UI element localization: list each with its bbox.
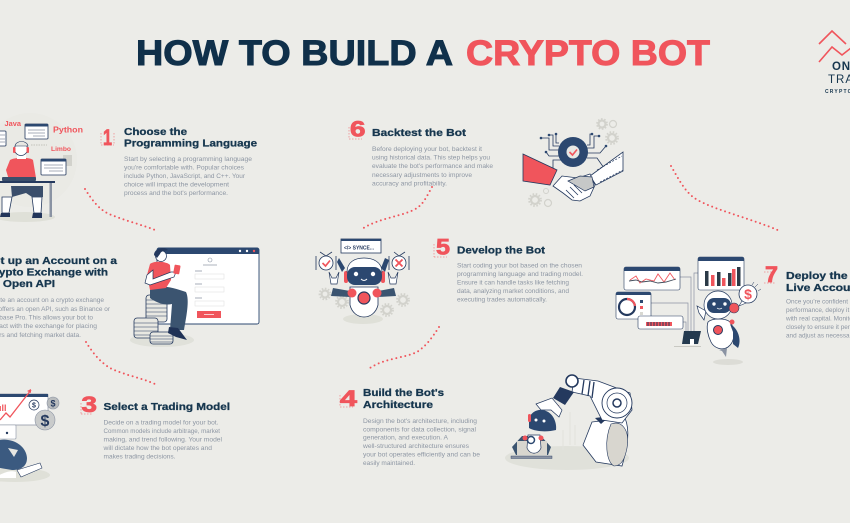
step 1 heading: Choose the	[124, 126, 187, 138]
step 4 body: Design the bot's architecture, including	[363, 418, 477, 425]
language labels: Limbo	[51, 146, 71, 153]
coin icons	[35, 397, 59, 430]
laptop	[674, 331, 701, 346]
bot head	[528, 410, 556, 431]
step 4 heading: Architecture	[363, 399, 433, 411]
step 3 body: Common models include arbitrage, market	[104, 428, 220, 435]
step 3 body	[102, 420, 222, 460]
progress window	[638, 316, 683, 329]
step 3 body: making, and trend following. Your model	[104, 436, 222, 444]
title: CRYPTO BOT	[466, 34, 710, 73]
illustration: programmer at desk	[0, 113, 83, 222]
check badge	[316, 252, 336, 270]
step 5 body	[457, 262, 583, 304]
coin icons: $	[41, 413, 50, 430]
donut chart window	[616, 292, 651, 319]
step 6 body	[372, 146, 493, 188]
illustration: deployed bot with dashboards	[616, 257, 761, 365]
step 6 body: using historical data. This step helps you	[372, 154, 490, 162]
floating robot	[697, 291, 740, 357]
step 3 body: makes trading decisions.	[104, 454, 176, 460]
dollar speech bubble: $	[744, 286, 752, 302]
dotted connector: step 2 to 3	[86, 342, 155, 384]
step 5 body: executing trades automatically.	[457, 296, 547, 304]
illustration: handshake with robot and brain chip	[523, 119, 623, 206]
person	[0, 142, 43, 218]
step 4 heading: Build the Bot's	[363, 387, 444, 399]
step 3	[81, 392, 230, 460]
step 1 body: choice will impact the development	[124, 182, 229, 188]
language labels: Python	[53, 124, 83, 134]
step 1 heading: Programming Language	[124, 138, 257, 150]
step 7 heading: Live Account	[786, 282, 850, 294]
gears	[320, 288, 409, 316]
arm base	[583, 416, 628, 466]
step 6 number: 6	[350, 116, 366, 142]
dollar speech bubble	[739, 282, 761, 306]
step 1 body: you're comfortable with. Popular choices	[124, 164, 244, 172]
cross badge	[389, 252, 409, 270]
step 4 body: generation, and execution. A	[363, 434, 449, 442]
step 7	[764, 262, 850, 340]
step 4	[340, 386, 480, 467]
red sleeve	[523, 154, 557, 185]
step 4 body: well-structured architecture ensures	[362, 443, 469, 450]
step 6 body: Before deploying your bot, backtest it	[372, 146, 482, 153]
step 5 body: Start coding your bot based on the chosen	[457, 262, 582, 270]
step 4 body: components for data collection, signal	[363, 426, 476, 434]
language labels	[4, 121, 83, 153]
step 1 body	[124, 156, 252, 197]
step 6	[349, 116, 493, 188]
step 4 body: your bot operates efficiently and can be	[363, 452, 480, 458]
step 1 heading	[124, 126, 257, 150]
step 3 number: 3	[82, 392, 97, 417]
step 2 heading	[0, 255, 117, 290]
illustration: trading model chart with coins	[0, 389, 59, 482]
step 3 heading: Select a Trading Model	[104, 401, 230, 413]
step 2	[0, 255, 117, 339]
step 4 heading	[363, 387, 444, 411]
step 6 body: necessary adjustments to improve	[372, 172, 472, 179]
step 1 body: include Python, JavaScript, and C++. Your	[124, 173, 246, 180]
step 5 number: 5	[436, 234, 450, 260]
gears	[529, 119, 618, 206]
logo	[819, 31, 850, 95]
seated person with laptop	[0, 425, 42, 478]
trading window: $	[32, 402, 36, 410]
gripper	[536, 387, 574, 417]
step 5 heading: Develop the Bot	[457, 244, 546, 256]
dotted connector: step 6 to 7	[671, 166, 780, 231]
step 7 number: 7	[765, 262, 778, 287]
dotted connector: step 4 to 5	[370, 327, 439, 368]
bar chart window	[698, 257, 744, 290]
line chart window	[624, 267, 680, 290]
step 4 number	[340, 386, 358, 411]
illustration: robot arm assembling bot	[505, 375, 632, 470]
robot arm	[590, 152, 623, 185]
bot torso on table	[511, 435, 552, 458]
code window: </> SYNCE...	[344, 246, 375, 252]
exchange sign-up window	[157, 248, 259, 324]
seated person	[145, 248, 188, 340]
code window	[25, 124, 48, 139]
coin icons: $	[50, 398, 56, 408]
step 4 body	[362, 418, 480, 467]
dotted connector: step 5 to 6	[362, 187, 432, 229]
title: HOW TO BUILD A	[136, 34, 453, 73]
step 3 body: Decide on a trading model for your bot.	[104, 420, 219, 426]
step 1 body: Start by selecting a programming language	[124, 156, 252, 163]
step 4 number: 4	[340, 386, 358, 411]
code window lower	[41, 159, 66, 175]
step 5 body: Ensure it can handle tasks like fetching	[457, 280, 569, 286]
coin stacks	[134, 295, 173, 344]
illustration: robot developing code	[316, 239, 409, 324]
step 1	[101, 125, 257, 197]
step 1 body: process and the bot's performance.	[124, 190, 228, 197]
desk	[0, 177, 55, 217]
step 4 body: easily maintained.	[363, 460, 415, 467]
step 1 number: 1	[103, 125, 112, 150]
step 6 body: evaluate the bot's performance and make	[372, 163, 493, 170]
title	[136, 34, 710, 73]
step 7 heading	[786, 270, 850, 294]
step 5 body: programming language and trading model.	[457, 271, 583, 278]
step 7 body	[785, 298, 850, 340]
step 6 body: accuracy and profitability.	[372, 180, 447, 188]
arm upper	[566, 375, 632, 423]
step 5 body: data, analyzing market conditions, and	[457, 288, 569, 295]
step 5	[434, 234, 583, 304]
dotted connector: step 1 to 2	[85, 189, 155, 230]
handshake	[553, 174, 595, 201]
step 2 body	[0, 297, 111, 339]
step 6 heading: Backtest the Bot	[372, 127, 467, 139]
brain chip	[558, 137, 588, 167]
step 3 body: will dictate how the bot operates and	[102, 445, 212, 452]
circuit lines	[540, 133, 607, 174]
illustration: person on coins with exchange window	[130, 248, 259, 347]
robot	[329, 258, 398, 317]
trading window	[0, 389, 48, 425]
language labels: Java	[4, 121, 21, 128]
